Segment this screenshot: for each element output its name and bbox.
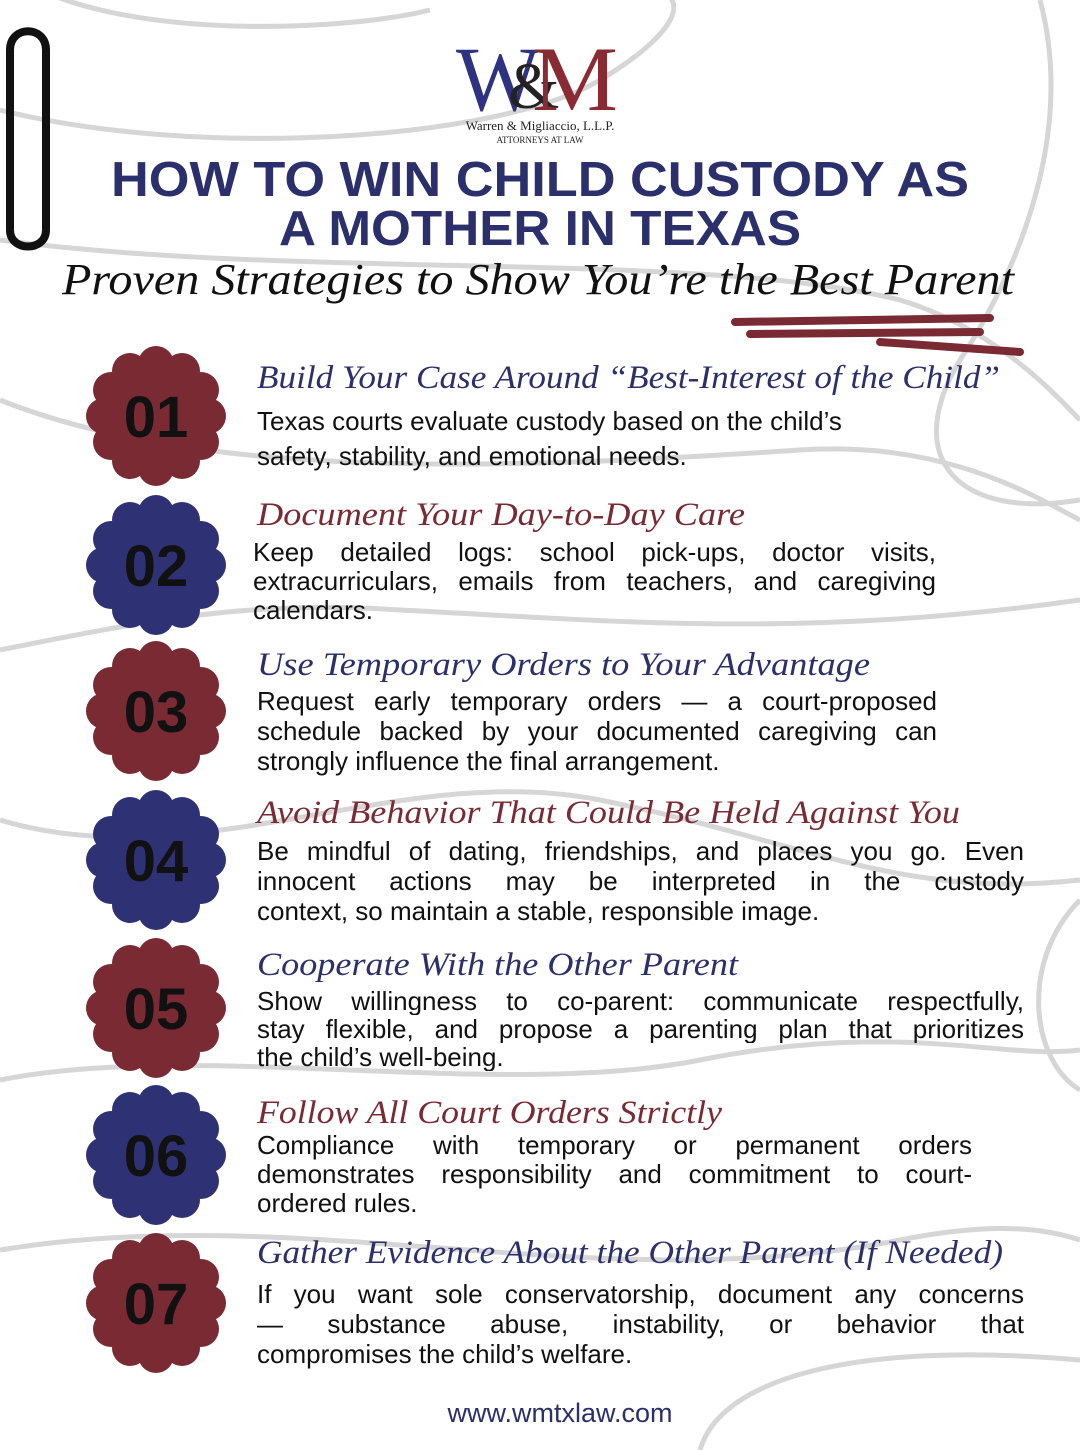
badge 06 (86, 1085, 226, 1225)
logo: & (508, 50, 559, 123)
text 1: safety, stability, and emotional needs. (257, 441, 687, 471)
text 1 (257, 406, 842, 471)
text 7: — substance abuse, instability, or behavior that (257, 1309, 1024, 1339)
text 2 (253, 538, 936, 625)
text 3: schedule backed by your documented caregiving can (257, 716, 937, 746)
logo: ATTORNEYS AT LAW (497, 135, 584, 145)
text 3: Request early temporary orders — a court-proposed (257, 686, 937, 716)
heading 7: Gather Evidence About the Other Parent (If Needed) (257, 1235, 1003, 1271)
text 5 (257, 987, 1024, 1071)
text 7 (257, 1279, 1024, 1369)
heading 2: Document Your Day-to-Day Care (256, 497, 745, 533)
badge 05 (86, 938, 226, 1078)
heading 1: Build Your Case Around “Best-Interest of the Child” (257, 360, 1000, 396)
subtitle: Proven Strategies to Show You’re the Best Parent (61, 255, 1016, 304)
badge 02 (86, 495, 226, 635)
badge 05: 05 (124, 977, 188, 1042)
badge 07 (86, 1233, 226, 1373)
badge 03 (86, 641, 226, 781)
heading 4: Avoid Behavior That Could Be Held Against You (255, 795, 960, 831)
text 7: If you want sole conservatorship, document any concerns (257, 1279, 1024, 1309)
text 4: innocent actions may be interpreted in the custody (257, 866, 1024, 896)
badge 02: 02 (124, 534, 188, 599)
footer url: www.wmtxlaw.com (447, 1398, 673, 1428)
icon: paperclip (6, 27, 50, 250)
text 7: compromises the child’s welfare. (257, 1339, 632, 1369)
heading 6: Follow All Court Orders Strictly (256, 1095, 722, 1131)
text 1: Texas courts evaluate custody based on the child’s (257, 406, 842, 436)
text 6 (257, 1131, 972, 1218)
badge 03: 03 (124, 680, 188, 745)
title: HOW TO WIN CHILD CUSTODY AS (111, 153, 969, 207)
text 3 (257, 686, 937, 776)
text 3: strongly influence the final arrangement. (257, 746, 720, 776)
text 4: Be mindful of dating, friendships, and places you go. Even (257, 836, 1024, 866)
heading 3: Use Temporary Orders to Your Advantage (257, 647, 870, 683)
badge 04: 04 (124, 829, 188, 894)
title: A MOTHER IN TEXAS (279, 202, 801, 255)
logo: M (532, 30, 618, 130)
logo (456, 30, 618, 145)
heading 5: Cooperate With the Other Parent (257, 947, 739, 983)
badge 04 (86, 790, 226, 930)
badge 01 (86, 346, 226, 486)
text 4 (257, 836, 1024, 926)
logo: W (456, 30, 540, 130)
badge 07: 07 (124, 1272, 188, 1337)
text 4: context, so maintain a stable, responsible image. (257, 896, 819, 926)
title (111, 153, 969, 255)
logo: Warren & Migliaccio, L.L.P. (466, 118, 614, 133)
badge 01: 01 (124, 385, 188, 450)
badge 06: 06 (124, 1124, 188, 1189)
brush stroke (731, 314, 1024, 356)
